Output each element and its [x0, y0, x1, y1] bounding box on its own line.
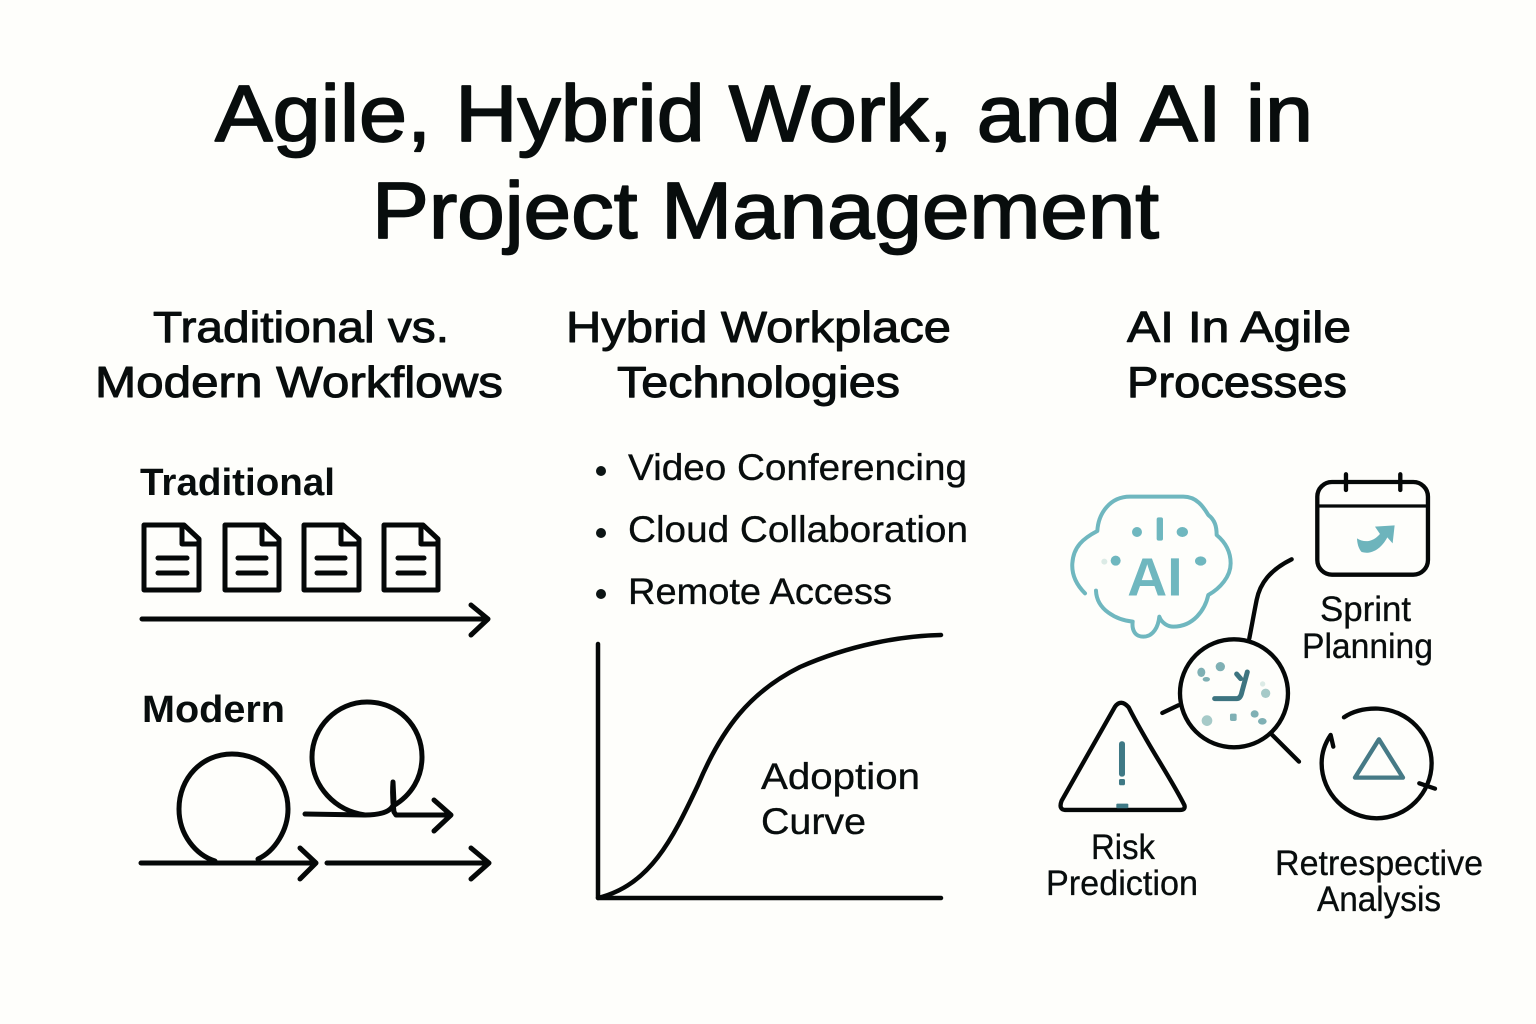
- heading: hybrid workplace technologies: [566, 303, 951, 407]
- icon: iterative loops: [141, 702, 489, 879]
- icon: AI cloud: AI: [1127, 547, 1183, 607]
- heading: hybrid workplace technologies: Technologies: [617, 358, 900, 407]
- bullet list: [596, 447, 968, 612]
- icon: calendar: [1317, 474, 1428, 575]
- icon: AI cloud: [1072, 497, 1231, 637]
- icons: four documents: [144, 525, 438, 590]
- bullet list: Video Conferencing: [628, 447, 967, 488]
- label: retrospective analysis: [1275, 844, 1483, 919]
- label: traditional: Traditional: [140, 462, 335, 504]
- heading: hybrid workplace technologies: Hybrid Workplace: [566, 303, 951, 352]
- title: Agile, Hybrid Work, and AI in: [215, 69, 1313, 158]
- heading: AI in agile processes: Processes: [1127, 358, 1347, 407]
- arrow: linear workflow: [142, 605, 488, 635]
- heading: traditional vs modern workflows: Traditional vs.: [153, 303, 449, 352]
- icon: retrospective cycle: [1322, 709, 1435, 818]
- connectors and hub: clock: [1162, 559, 1299, 762]
- heading: AI in agile processes: [1127, 303, 1351, 407]
- icon: risk warning triangle: [1061, 703, 1185, 810]
- panel: AI in agile processes: [1046, 474, 1483, 919]
- label: risk prediction: [1046, 828, 1198, 903]
- panel: traditional vs modern workflows: [140, 462, 489, 879]
- title: [215, 69, 1313, 255]
- heading: traditional vs modern workflows: [95, 303, 503, 407]
- label: retrospective analysis: Analysis: [1317, 880, 1441, 919]
- heading: AI in agile processes: AI In Agile: [1127, 303, 1351, 352]
- title: Project Management: [372, 166, 1159, 255]
- chart: adoption curve: Curve: [761, 801, 866, 842]
- label: retrospective analysis: Retrespective: [1275, 844, 1483, 883]
- bullet list: Cloud Collaboration: [628, 509, 968, 550]
- panel: hybrid workplace technologies: [596, 447, 968, 898]
- label: sprint planning: [1302, 590, 1433, 666]
- label: sprint planning: Sprint: [1320, 590, 1411, 629]
- label: modern: Modern: [142, 689, 285, 731]
- label: sprint planning: Planning: [1302, 627, 1433, 666]
- chart: adoption curve: Adoption: [761, 756, 920, 797]
- chart: adoption curve: [598, 635, 941, 898]
- label: risk prediction: Risk: [1091, 828, 1155, 867]
- heading: traditional vs modern workflows: Modern Workflows: [95, 358, 503, 407]
- label: risk prediction: Prediction: [1046, 864, 1198, 903]
- bullet list: Remote Access: [628, 571, 892, 612]
